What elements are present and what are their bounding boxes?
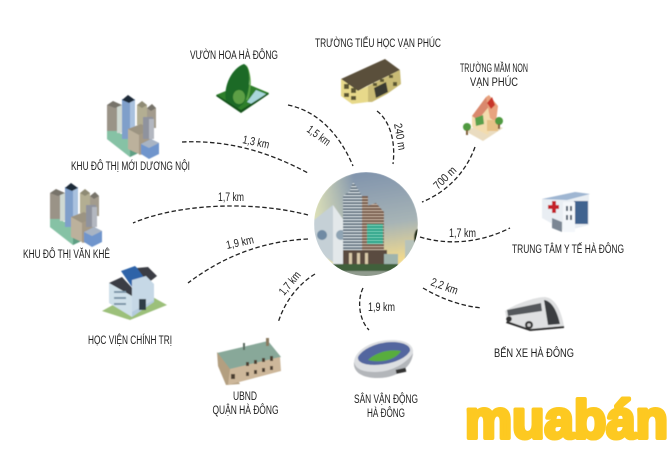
label: khu đô thị văn khê: KHU ĐÔ THỊ VĂN KHÊ [23, 248, 110, 261]
distance labels: 1,9 km [225, 234, 255, 252]
distance labels [218, 122, 476, 314]
icon: district office [217, 338, 281, 385]
watermark logo: muabán: muabán [465, 390, 668, 450]
dashed connector lines [133, 105, 510, 330]
central project image [314, 172, 422, 278]
label: trung tâm y tế: TRUNG TÂM Y TẾ HÀ ĐÔNG [512, 243, 624, 256]
label: khu đô thị mới dương nội: KHU ĐÔ THỊ MỚI DƯƠNG NỘI [71, 160, 190, 173]
label: trường mầm non: VẠN PHÚC [470, 76, 518, 89]
icon: medical centre [542, 192, 590, 232]
label: vườn hoa: VƯỜN HOA HÀ ĐÔNG [190, 49, 278, 62]
distance labels: 1,3 km [241, 134, 270, 152]
distance labels: 700 m [432, 165, 459, 192]
icon: Dương Nội city [107, 95, 159, 159]
label: UBND quận hà đông: QUẬN HÀ ĐÔNG [212, 404, 279, 417]
distance labels: 240 m [391, 122, 408, 151]
label: UBND quận hà đông: UBND [233, 391, 257, 403]
icon: Văn Khê city [50, 183, 102, 247]
icon: kindergarten house [463, 95, 503, 141]
label: trường tiểu học: TRƯỜNG TIỂU HỌC VẠN PHÚC [315, 37, 441, 50]
icon: garden [216, 64, 269, 113]
label: sân vận động: HÀ ĐÔNG [367, 407, 405, 420]
icon: academy building [102, 266, 167, 320]
distance labels: 1,9 km [368, 302, 395, 314]
label: trường mầm non: TRƯỜNG MẦM NON [460, 62, 528, 75]
distance labels: 1,5 km [304, 124, 332, 149]
icon: stadium [354, 340, 413, 378]
distance labels: 1,7 km [218, 192, 244, 204]
distance labels: 1,7 km [277, 270, 304, 298]
label: học viện chính trị: HỌC VIỆN CHÍNH TRỊ [88, 334, 172, 347]
label: sân vận động: SÂN VẬN ĐỘNG [354, 393, 418, 406]
icon: school building [341, 59, 401, 104]
distance labels: 1,7 km [449, 228, 476, 240]
label: bến xe: BẾN XE HÀ ĐÔNG [494, 347, 574, 360]
icon: bus [505, 297, 564, 331]
distance labels: 2,2 km [429, 277, 459, 297]
